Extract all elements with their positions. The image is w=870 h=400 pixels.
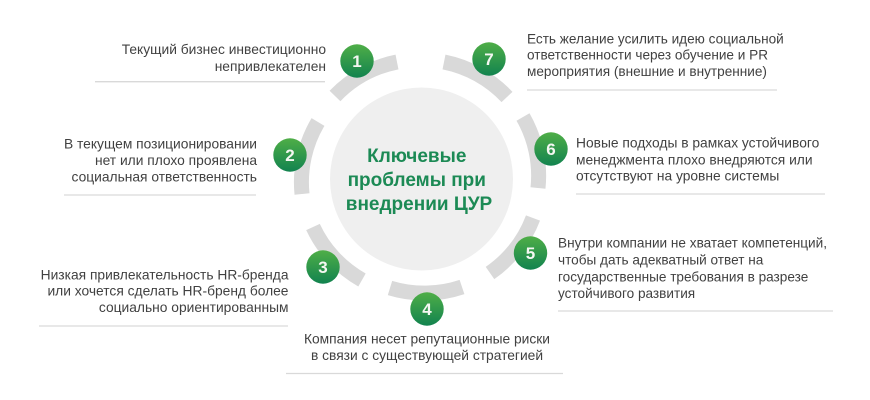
badge 3: 3 <box>318 258 328 277</box>
badge 4: 4 <box>422 300 432 319</box>
text block 2: В текущем позиционировании <box>64 136 257 151</box>
badge 3 <box>306 250 340 284</box>
title: Ключевые <box>367 146 466 167</box>
badge 2 <box>273 138 307 172</box>
badge 4 <box>410 292 444 326</box>
badge 7: 7 <box>484 50 494 69</box>
text block 1: непривлекателен <box>215 59 326 74</box>
title: внедрении ЦУР <box>346 194 493 215</box>
badge 5 <box>514 236 547 270</box>
text block 3: Низкая привлекательность HR-бренда <box>41 267 289 282</box>
text block 7: Есть желание усилить идею социальной <box>527 31 784 46</box>
ring segments <box>301 62 539 293</box>
text block 6: отсутствуют на уровне системы <box>576 168 779 183</box>
text block 4: Компания несет репутационные риски <box>304 331 550 346</box>
text block 2: нет или плохо проявлена <box>95 153 257 168</box>
text block 3: или хочется сделать HR-бренд более <box>47 284 289 299</box>
text block 5: чтобы дать адекватный ответ на <box>558 252 764 267</box>
badge 5: 5 <box>526 244 535 263</box>
text block 6 <box>576 136 825 194</box>
text block 3 <box>39 267 289 326</box>
central circle with title <box>330 88 513 270</box>
text block 5: Внутри компании не хватает компетенций, <box>558 236 827 251</box>
text block 6: Новые подходы в рамках устойчивого <box>576 136 820 151</box>
text block 6: менеджмента плохо внедряются или <box>576 152 813 167</box>
text block 1: Текущий бизнес инвестиционно <box>122 42 326 57</box>
text block 7: ответственности через обучение и PR <box>527 48 768 63</box>
badge 1: 1 <box>352 52 362 71</box>
text block 5: устойчивого развития <box>558 286 695 301</box>
text block 1 <box>95 42 326 82</box>
text block 7 <box>527 31 784 90</box>
badge 7 <box>472 42 506 76</box>
badge 6 <box>534 132 568 166</box>
text block 4 <box>286 331 563 374</box>
badge 2: 2 <box>285 146 295 165</box>
text block 7: мероприятия (внешние и внутренние) <box>527 64 767 79</box>
badge 1 <box>340 44 374 78</box>
text block 5 <box>558 236 833 311</box>
text block 3: социально ориентированным <box>99 300 288 315</box>
text block 5: государственные требования в разрезе <box>558 270 808 285</box>
title: проблемы при <box>348 170 486 191</box>
text block 2 <box>64 136 257 195</box>
text block 4: в связи с существующей стратегией <box>311 348 543 363</box>
text block 2: социальная ответственность <box>72 170 257 185</box>
badge 6: 6 <box>546 140 556 159</box>
